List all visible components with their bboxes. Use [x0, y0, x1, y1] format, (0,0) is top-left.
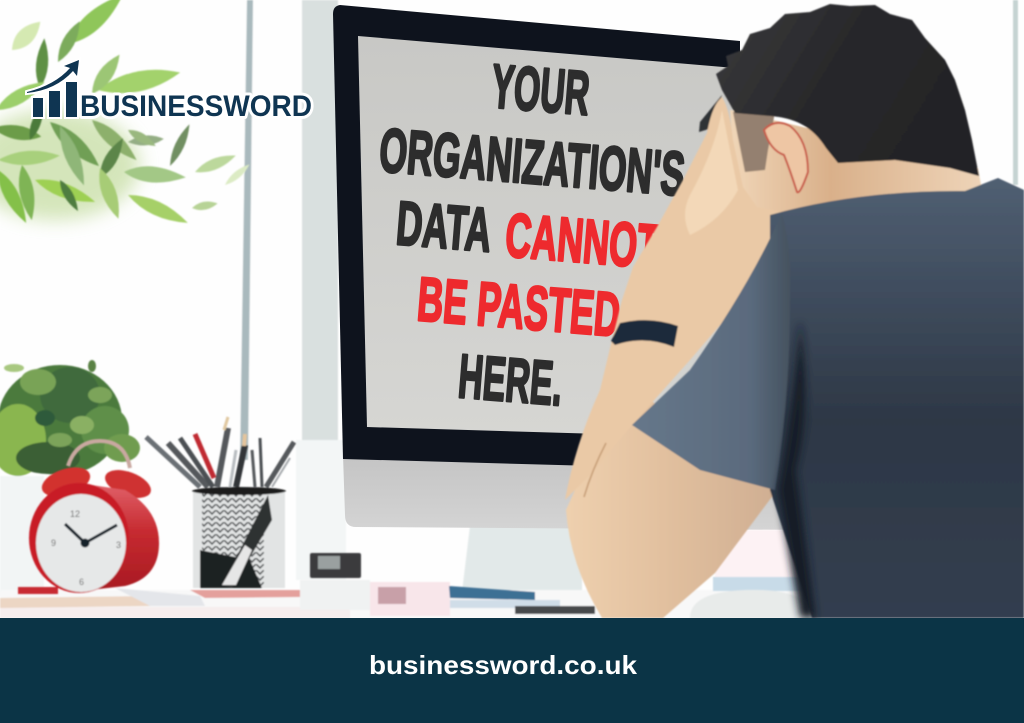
ear: [764, 123, 808, 192]
footer website address: businessword.co.uk: [369, 650, 638, 680]
light shading on hand and wrist: [685, 110, 738, 235]
brand logo: [27, 60, 312, 123]
line: your: YOUR: [489, 52, 592, 129]
small dark jar: [310, 553, 361, 578]
clock numerals: 6: [79, 577, 84, 587]
bamboo plant, top left: [0, 0, 252, 229]
line: data: DATA: [394, 189, 494, 266]
computer mouse and keyboard: [690, 530, 823, 618]
logo bars and arrow: [27, 60, 79, 117]
line: organization's: ORGANIZATION'S: [377, 116, 687, 209]
hand and forearm: [565, 97, 782, 500]
footer band: [0, 618, 1024, 723]
clock body: [85, 484, 159, 590]
man at the desk, head in hand: [565, 4, 1024, 618]
clock handle: [68, 441, 130, 468]
logo wordmark: BUSINESSWORD: [80, 90, 312, 123]
clock numerals: [51, 509, 121, 587]
soft green haze behind bamboo: [0, 110, 140, 220]
mesh cup: [192, 487, 286, 588]
neck and head skin: [730, 110, 982, 215]
line: cannot: CANNOT: [503, 201, 662, 282]
clock numerals: 12: [70, 509, 80, 519]
shirt sleeve: [632, 213, 790, 490]
pencils in mesh cup: [146, 417, 294, 588]
black wristband: [611, 320, 678, 347]
clock hands: [65, 524, 117, 543]
clock bells: [38, 462, 94, 502]
monitor screen: [358, 36, 735, 438]
side hair behind hand: [699, 95, 722, 132]
shirt fold shadow: [778, 320, 816, 618]
screen message: [377, 52, 687, 419]
clock base: [18, 587, 58, 594]
shaved side of head: [733, 112, 775, 172]
hair: [716, 4, 979, 176]
monitor stand: [462, 526, 582, 592]
torso of t-shirt: [770, 178, 1024, 618]
monitor bezel: [333, 5, 740, 470]
line: be pasted: BE PASTED: [415, 265, 623, 350]
crease of the elbow: [584, 443, 606, 497]
monitor chin: [343, 455, 800, 530]
line: here: HERE.: [456, 342, 565, 419]
potted green plant, lower left: [0, 360, 140, 596]
clock face: [36, 494, 126, 592]
desk surface: [0, 580, 820, 618]
upper arm: [566, 400, 777, 618]
clock rim: [29, 483, 129, 593]
red alarm clock: [18, 441, 159, 594]
pencils: [146, 417, 294, 487]
desktop monitor showing message: [333, 5, 800, 592]
clock numerals: 9: [51, 538, 56, 548]
clock numerals: 3: [116, 540, 121, 550]
